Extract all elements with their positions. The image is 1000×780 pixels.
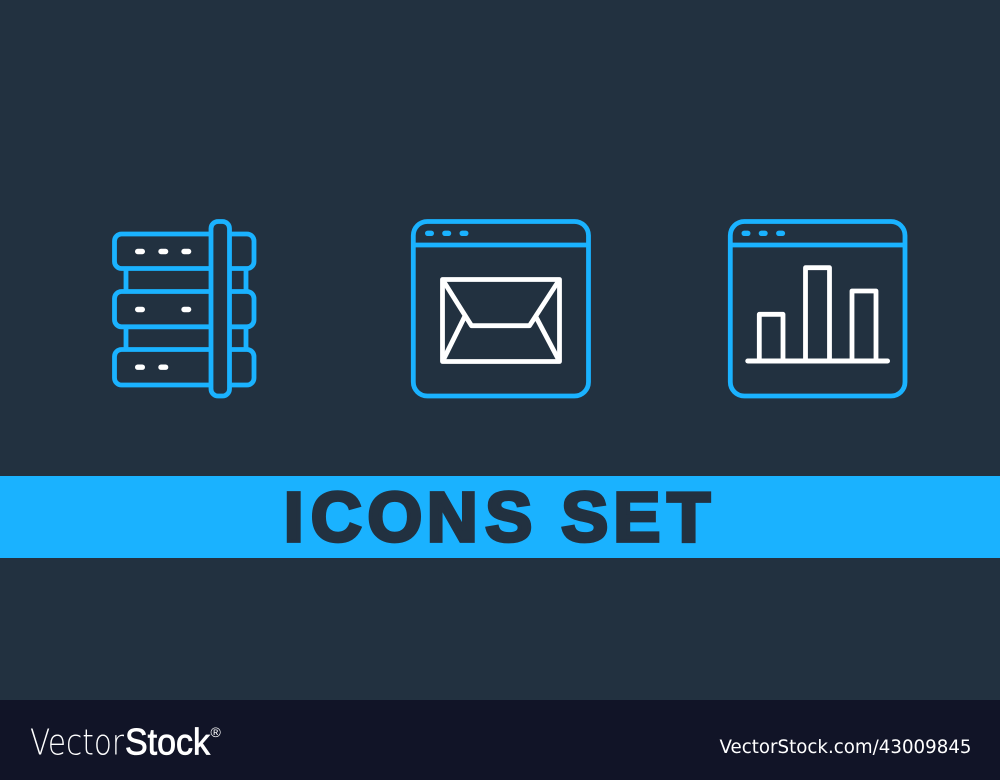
icon: server rack bbox=[114, 222, 254, 396]
bar chart bbox=[748, 268, 888, 361]
browser frame bbox=[730, 222, 905, 396]
footer logo: Vector bbox=[30, 722, 124, 763]
footer logo: Stock bbox=[125, 721, 210, 762]
banner bbox=[0, 476, 1000, 558]
footer bar bbox=[0, 700, 1000, 780]
footer logo bbox=[30, 721, 210, 763]
icon: browser window with bar chart bbox=[730, 222, 905, 396]
registered mark: ® bbox=[210, 724, 222, 740]
envelope bbox=[442, 280, 560, 362]
browser frame bbox=[413, 222, 588, 396]
banner title: ICONS SET bbox=[284, 478, 710, 556]
footer image id: VectorStock.com/43009845 bbox=[720, 736, 972, 758]
icon: browser window with envelope bbox=[413, 222, 588, 396]
